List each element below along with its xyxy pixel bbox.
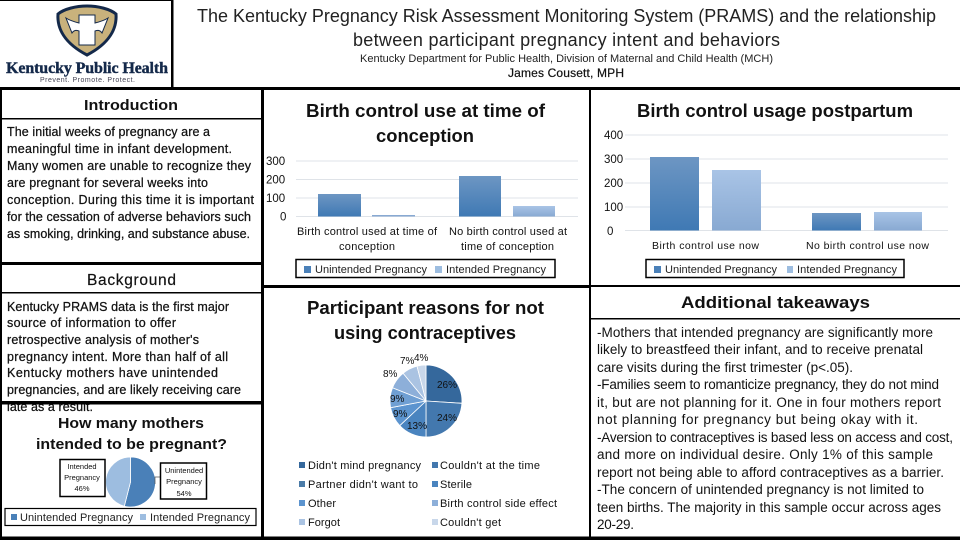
logo: Kentucky Public Health xyxy=(6,6,168,84)
text block: takeaways: -Aversion to contraceptives is based less on access and cost, xyxy=(597,430,953,445)
heading xyxy=(36,415,227,453)
text block: introduction: The initial weeks of pregnancy are a xyxy=(7,125,210,139)
text block: background: late as a result. xyxy=(7,400,93,414)
bar chart: conception xyxy=(266,156,578,253)
pie chart: reasons: 9% xyxy=(390,394,405,405)
bar chart: postpartum: 300 xyxy=(604,154,623,166)
legend: Forgot xyxy=(308,517,340,529)
heading xyxy=(307,298,544,343)
heading xyxy=(306,101,546,146)
bar chart: conception: 100 xyxy=(266,193,285,205)
bar chart: postpartum: No birth control use now xyxy=(806,240,929,252)
legend: Intended Pregnancy xyxy=(797,264,898,276)
text block: background: pregnancies, and are likely receiving care xyxy=(7,383,241,397)
heading: Birth control usage postpartum xyxy=(637,101,913,121)
bar chart: postpartum: 100 xyxy=(604,202,623,214)
legend: Intended Pregnancy xyxy=(150,512,250,524)
text block: introduction: for the cessation of adverse behaviors such xyxy=(7,210,251,224)
text block: introduction xyxy=(7,125,255,241)
panel: how many mothers intended to be pregnant xyxy=(5,415,256,526)
text block: introduction: meaningful time in infant development. xyxy=(7,142,232,156)
text block: takeaways: -The concern of unintended pregnancy is not limited to xyxy=(597,482,924,497)
callout: unintended 54% xyxy=(155,463,206,499)
title xyxy=(197,6,936,50)
title: between participant pregnancy intent and behaviors xyxy=(353,30,780,50)
icon: shield with cross xyxy=(58,6,116,55)
callout: unintended 54%: Pregnancy xyxy=(166,477,202,486)
heading: intended to be pregnant? xyxy=(36,436,227,453)
panel: additional takeaways xyxy=(597,293,953,532)
legend: Birth control side effect xyxy=(440,498,557,510)
affiliation: Kentucky Department for Public Health, Division of Maternal and Child Health (MCH) xyxy=(360,53,773,65)
legend: Intended Pregnancy xyxy=(446,264,546,276)
pie chart: reasons xyxy=(383,353,462,437)
bar chart: conception: Birth control used at time of xyxy=(297,226,438,238)
bar chart: conception: 300 xyxy=(266,156,285,168)
text block: takeaways: -Families seem to romanticize pregnancy, they do not mind xyxy=(597,377,939,392)
bar chart: conception: time of conception xyxy=(461,241,554,253)
bar chart: postpartum xyxy=(604,130,948,252)
text block: background: Kentucky PRAMS data is the first major xyxy=(7,300,229,314)
heading: conception xyxy=(376,126,474,146)
legend xyxy=(296,260,555,278)
legend: Partner didn't want to xyxy=(308,479,418,491)
callout: unintended 54%: Unintended xyxy=(165,466,203,475)
text block: takeaways xyxy=(597,325,953,532)
text block: background xyxy=(7,300,241,414)
legend: Sterile xyxy=(440,479,472,491)
text block: background: source of information to offer xyxy=(7,316,176,330)
legend: Didn't mind pregnancy xyxy=(308,460,422,472)
text block: takeaways: and more on individual desire. Only 1% of this sample xyxy=(597,447,933,462)
title: The Kentucky Pregnancy Risk Assessment Monitoring System (PRAMS) and the relationship xyxy=(197,6,936,26)
bar chart: postpartum: 200 xyxy=(604,178,623,190)
pie chart: reasons: 24% xyxy=(437,413,457,424)
pie chart: reasons: 26% xyxy=(437,380,457,391)
legend xyxy=(646,260,904,278)
legend xyxy=(299,460,557,529)
legend: Couldn't at the time xyxy=(440,460,540,472)
text block: takeaways: teen births. The majority in this sample occur across ages xyxy=(597,500,941,515)
bar chart: postpartum: 0 xyxy=(607,226,613,238)
text block: takeaways: 20-29. xyxy=(597,517,634,532)
pie chart: reasons: 4% xyxy=(414,353,429,364)
legend: Other xyxy=(308,498,336,510)
text block: background: retrospective analysis of mother's xyxy=(7,333,199,347)
pie chart: reasons: 8% xyxy=(383,369,398,380)
panel divider over clipped text xyxy=(0,401,262,404)
bar chart: conception: 0 xyxy=(280,212,286,224)
callout: intended 46%: Intended xyxy=(67,462,97,471)
heading: How many mothers xyxy=(58,415,204,432)
pie chart: pregnancy intent xyxy=(106,457,156,507)
pie chart: reasons: 9% xyxy=(393,409,408,420)
text block: introduction: conception. During this time it is important xyxy=(7,193,255,207)
heading: using contraceptives xyxy=(334,323,516,343)
text block: background: Kentucky mothers have unintended xyxy=(7,366,218,380)
callout: unintended 54%: 54% xyxy=(176,489,192,498)
text block: takeaways: report not being able to afford contraceptives as a barrier. xyxy=(597,465,944,480)
legend xyxy=(5,508,256,526)
callout: intended 46% xyxy=(60,460,105,496)
text block: takeaways: likely to breastfeed their infant, and to receive prenatal xyxy=(597,342,923,357)
bar chart: postpartum: Birth control use now xyxy=(652,240,759,252)
heading: Introduction: Introduction xyxy=(84,97,178,114)
legend: Couldn't get xyxy=(440,517,501,529)
logo tagline: Prevent. Promote. Protect. xyxy=(40,77,135,84)
heading: Birth control use at time of xyxy=(306,101,546,121)
heading: Participant reasons for not xyxy=(307,298,544,318)
text block: introduction: are pregnant for several weeks into xyxy=(7,176,208,190)
heading: Additional takeaways xyxy=(681,293,870,312)
bar chart: conception: conception xyxy=(339,241,395,253)
pie chart: reasons: 13% xyxy=(407,421,427,432)
panel: participant reasons for not using contraceptives xyxy=(299,298,557,529)
legend: Unintended Pregnancy xyxy=(315,264,428,276)
text block: takeaways: -Mothers that intended pregnancy are significantly more xyxy=(597,325,933,340)
bar chart: postpartum: 400 xyxy=(604,130,623,142)
callout: intended 46%: 46% xyxy=(74,484,90,493)
panel: background xyxy=(7,272,241,414)
text block: takeaways: not planning for pregnancy but being okay with it. xyxy=(597,412,918,427)
panel: birth control use at time of conception xyxy=(266,101,578,278)
callout: intended 46%: Pregnancy xyxy=(64,473,100,482)
text block: background: pregnancy intent. More than half of all xyxy=(7,350,228,364)
bar chart: conception: No birth control used at xyxy=(449,226,567,238)
logo wordmark: Kentucky Public Health xyxy=(6,60,168,77)
heading: Background: Background xyxy=(87,272,176,289)
legend: Unintended Pregnancy xyxy=(665,264,778,276)
bar chart: conception: 200 xyxy=(266,174,285,186)
panel: birth control usage postpartum xyxy=(604,101,948,278)
author: James Cousett, MPH xyxy=(508,66,624,80)
text block: takeaways: care visits during the first trimester (p<.05). xyxy=(597,360,853,375)
legend: Unintended Pregnancy xyxy=(20,512,134,524)
text block: introduction: as smoking, drinking, and substance abuse. xyxy=(7,227,250,241)
text block: introduction: Many women are unable to recognize they xyxy=(7,159,252,173)
pie chart: reasons: 7% xyxy=(400,356,415,367)
panel: introduction xyxy=(7,97,255,241)
text block: takeaways: it, but are not planning for it. One in four mothers report xyxy=(597,395,941,410)
